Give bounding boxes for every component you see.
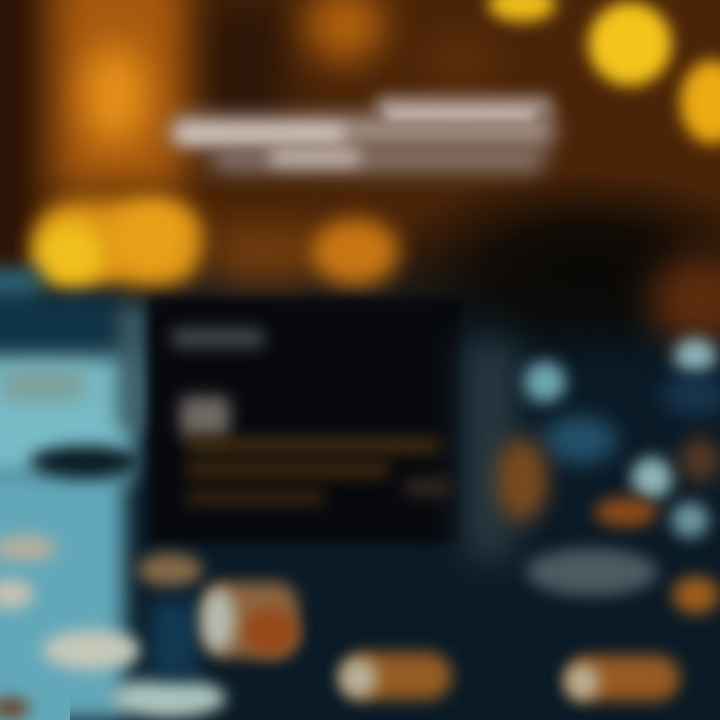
title, illegible in the reference [170,96,555,172]
card heading [172,328,264,348]
stacked discs, lower left [0,535,226,718]
warm curtain glow, upper left [55,0,500,190]
connecting glow, right of card [465,340,515,560]
bokeh lights, top right [488,0,720,144]
glowing jars, right [496,338,720,614]
bokeh lights, middle left [34,200,399,289]
card icon [180,396,230,438]
amber jar, lower centre [201,582,298,658]
amber discs, bottom [339,652,680,701]
teal panel, left [0,270,146,720]
dark card [150,298,462,543]
card text lines [185,438,449,505]
